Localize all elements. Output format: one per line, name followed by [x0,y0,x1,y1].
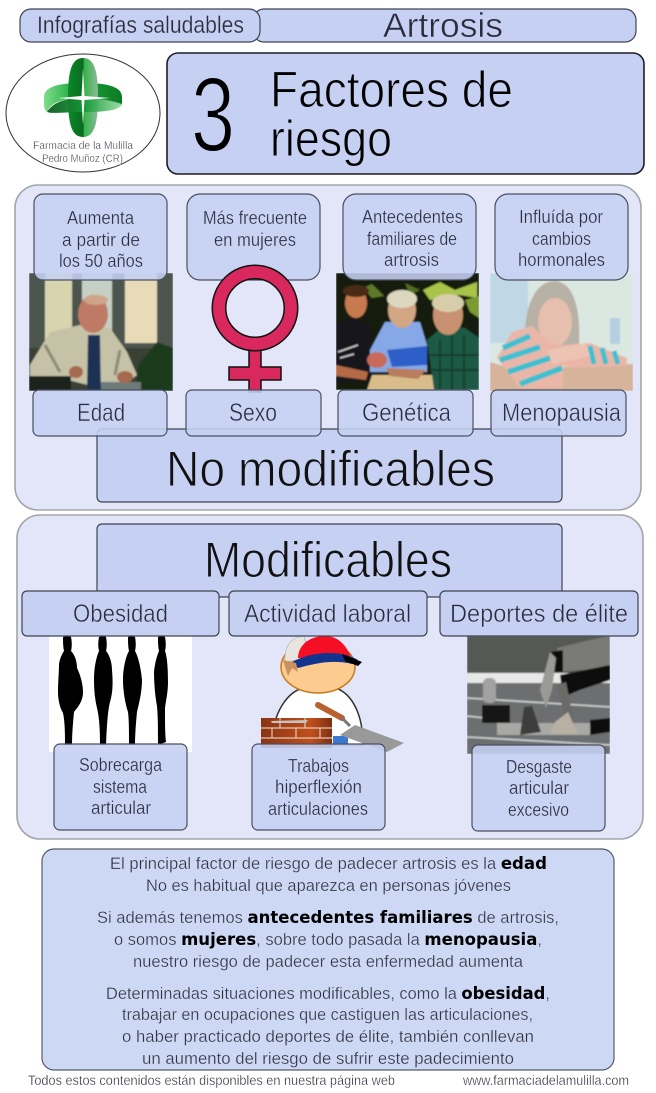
label: Obesidad: Obesidad [73,600,168,628]
title text: riesgo [270,110,392,167]
heading: Modificables: Modificables [204,532,452,588]
card: Trabajos hiperflexión articulaciones: hiperflexión [275,777,362,797]
paragraph: antecedentes: Si además tenemos antecedentes familiares de artrosis, [97,908,559,928]
number 3: 3 [191,56,235,174]
card: Desgaste articular excesivo: Desgaste [506,757,572,777]
paragraph: antecedentes [97,908,559,971]
label: Edad [33,390,167,436]
icon: green cross [44,58,122,137]
card: Aumenta a partir de los 50 años: a partir de [62,230,140,250]
label: Deportes de élite: Deportes de élite [450,600,628,628]
header tab: Artrosis: Artrosis [383,7,503,45]
title text: Factores de [270,61,513,118]
logo text: Pedro Muñoz (CR) [42,153,123,165]
icon: female symbol [219,272,291,392]
card: Sobrecarga sistema articular [54,744,187,830]
card: Sobrecarga sistema articular: articular [91,798,151,818]
label: Menopausia: Menopausia [502,399,621,427]
label: Genética [338,390,473,436]
photo: woman in menopause [490,273,633,391]
paragraph: situaciones modificables: o haber practicado deportes de élite, también conllevan [122,1027,534,1046]
card: Antecedentes familiares de artrosis [343,194,476,280]
paragraph: antecedentes: o somos mujeres, sobre todo pasada la menopausia, [114,930,542,950]
paragraph: situaciones modificables: trabajar en ocupaciones que castiguen las articulaciones, [122,1005,533,1024]
card: Sobrecarga sistema articular: sistema [93,777,148,797]
footer note: Todos estos contenidos están disponibles en nuestra página web [28,1072,395,1088]
card: Desgaste articular excesivo: articular [509,778,569,798]
label: Actividad laboral [229,591,427,636]
title text [270,61,513,167]
title panel [167,53,644,174]
card: Desgaste articular excesivo: excesivo [508,800,569,820]
card: Más frecuente en mujeres [187,194,320,280]
card: Influída por cambios hormonales: Influída por [519,207,603,227]
photo: obesity silhouettes [49,636,192,752]
photo: family [336,273,479,390]
logo text [33,140,134,165]
card: Trabajos hiperflexión articulaciones: Trabajos [288,756,349,776]
card: Aumenta a partir de los 50 años: los 50 años [59,251,143,271]
panel: no modificables [15,185,641,510]
logo text: Farmacia de la Mulilla [33,140,134,152]
summary text panel [42,849,614,1070]
paragraph: edad: El principal factor de riesgo de padecer artrosis es la edad [110,854,547,874]
heading: No modificables [97,429,562,502]
card: Desgaste articular excesivo [472,745,605,831]
card: Influída por cambios hormonales: cambios [532,229,591,249]
card: Aumenta a partir de los 50 años: Aumenta [67,208,135,228]
photo: older man [29,273,173,391]
label: Obesidad [22,591,219,636]
panel: modificables [17,515,643,839]
paragraph: situaciones modificables: un aumento del riesgo de sufrir este padecimiento [142,1049,514,1068]
header tab: Artrosis [253,7,636,45]
paragraph: edad [110,854,547,895]
card: Trabajos hiperflexión articulaciones [252,744,385,830]
heading: Modificables [97,524,562,597]
label: Menopausia [491,390,626,436]
photo: sprinter on starting blocks [467,636,610,754]
label: Deportes de élite [440,591,638,636]
label: Sexo: Sexo [229,399,277,427]
card: Influída por cambios hormonales [495,194,628,280]
paragraph: situaciones modificables: Determinadas situaciones modificables, como la obesidad, [106,984,550,1004]
card: Más frecuente en mujeres: Más frecuente [203,208,307,228]
card: Antecedentes familiares de artrosis: artrosis [384,250,439,270]
label: Actividad laboral: Actividad laboral [244,600,411,628]
card: Antecedentes familiares de artrosis: familiares de [367,229,457,249]
illustration: bricklayer [261,636,404,752]
card: Sobrecarga sistema articular: Sobrecarga [79,755,163,775]
paragraph: situaciones modificables [106,984,550,1068]
card: Más frecuente en mujeres: en mujeres [214,230,296,250]
card: Aumenta a partir de los 50 años [34,194,167,280]
label: Sexo [186,390,321,436]
paragraph: antecedentes: nuestro riesgo de padecer esta enfermedad aumenta [133,952,524,971]
heading: No modificables: No modificables [166,441,495,497]
footer website: www.farmaciadelamulilla.com [462,1072,629,1088]
logo: Farmacia de la Mulilla [6,54,160,172]
label: Genética: Genética [362,399,451,427]
header tab: Infografías saludables: Infografías saludables [37,12,244,39]
card: Antecedentes familiares de artrosis: Antecedentes [362,207,463,227]
card: Trabajos hiperflexión articulaciones: articulaciones [268,799,368,819]
card: Influída por cambios hormonales: hormonales [518,250,605,270]
label: Edad: Edad [77,399,125,427]
paragraph: edad: No es habitual que aparezca en personas jóvenes [146,876,511,895]
